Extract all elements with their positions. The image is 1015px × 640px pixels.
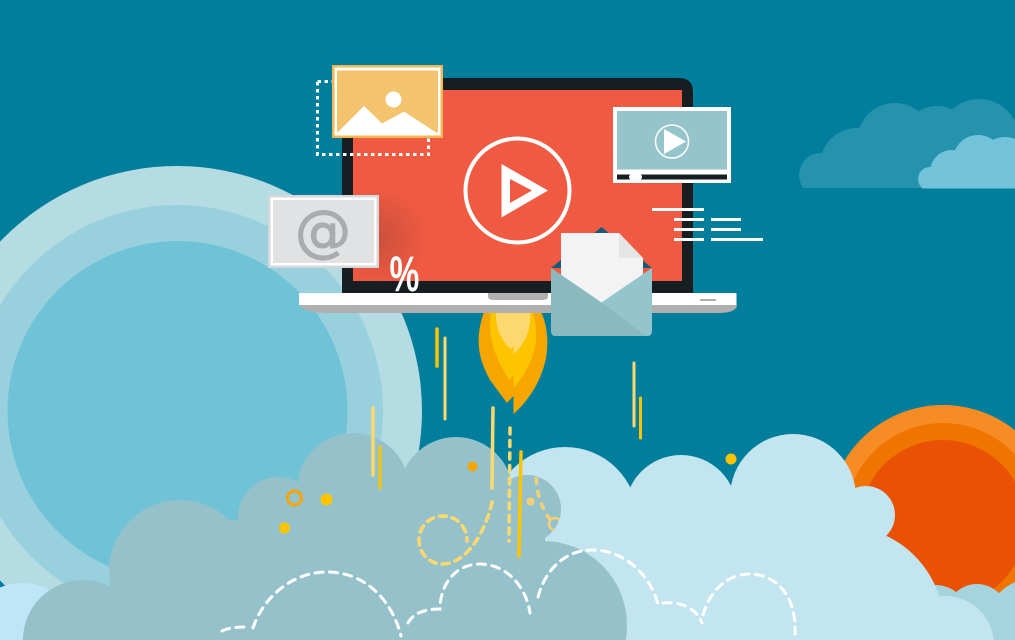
video player card bbox=[613, 107, 731, 183]
laptop bbox=[299, 78, 737, 313]
dotted selection frame bbox=[318, 82, 428, 154]
sun bbox=[828, 405, 1015, 635]
email card bbox=[268, 195, 379, 268]
large concentric circles bbox=[0, 166, 422, 640]
cloud bottom left bbox=[0, 583, 79, 640]
clipped yellow trail and ring bbox=[536, 477, 561, 530]
envelope bbox=[551, 227, 652, 336]
light cloud top right bbox=[918, 135, 1015, 194]
cloud bottom right bbox=[900, 578, 1015, 640]
email card: @ bbox=[295, 199, 351, 264]
white dashed cloud outlines bbox=[222, 550, 795, 636]
text lines bbox=[652, 208, 763, 241]
play button bbox=[466, 138, 570, 242]
dark cloud top right bbox=[799, 99, 1015, 188]
confetti dots bbox=[279, 454, 736, 534]
yellow dashed vertical trail bbox=[509, 428, 510, 541]
rocket flame bbox=[479, 312, 547, 414]
speed lines bbox=[373, 329, 640, 556]
yellow dashed loop trail bbox=[419, 502, 492, 564]
pale cloud front right bbox=[492, 434, 994, 640]
grey-teal cloud front left bbox=[23, 433, 627, 640]
percent sign: % bbox=[390, 246, 419, 303]
image card bbox=[332, 65, 443, 138]
